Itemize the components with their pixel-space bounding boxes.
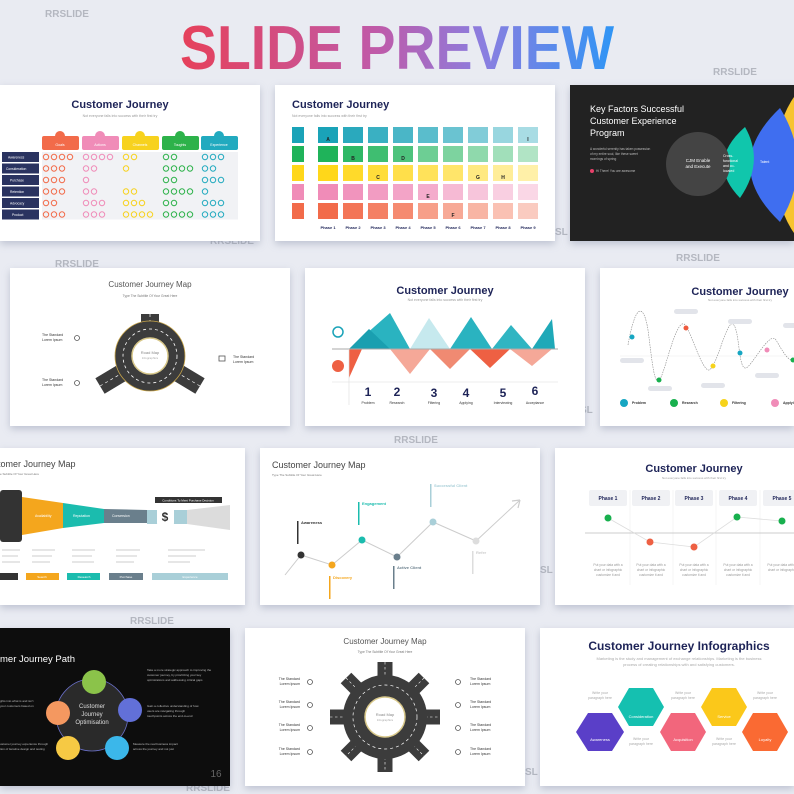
slide 8: zigzag map: Awareness <box>301 520 323 525</box>
slide 5: triangle chart: 1 <box>365 385 372 399</box>
slide 2: color grid: A <box>326 137 330 143</box>
slide 2: color grid: B <box>351 156 355 162</box>
slide 9: phase table: customize it and <box>726 573 750 577</box>
watermarks: RRSLIDE <box>210 236 254 247</box>
watermarks: RRSLIDE <box>676 253 720 264</box>
slide 1: customer journey table: Experience <box>210 143 228 147</box>
slide 2: color grid: G <box>476 175 480 181</box>
slide 9: phase table: Phase 5 <box>773 496 792 502</box>
slide 10: journey path dark: Optimisation <box>75 720 109 726</box>
slide 9: phase table: chart or infographic <box>724 568 752 572</box>
slide 1: customer journey table: Awareness <box>8 156 25 160</box>
slide 10: journey path dark: Journey <box>81 712 103 718</box>
slide 7: funnel map: Search <box>37 575 47 579</box>
slide 9: phase table: Not everyone falls into success with their first try <box>662 476 727 480</box>
slide 8: zigzag map <box>260 448 540 605</box>
slide 3: key factors dark: of my entire soul, like these sweet <box>590 152 638 156</box>
slide 12: hexagon infographics: Service <box>717 714 731 719</box>
slide 5: triangle chart: Problem <box>361 401 375 405</box>
slide 3: key factors dark: located <box>723 169 734 173</box>
slide 11: gear road map: The Standard <box>470 747 491 751</box>
slide 1: customer journey table: Channels <box>133 143 148 147</box>
slide 11: gear road map: The Standard <box>470 723 491 727</box>
slide 5: triangle chart: Filtering <box>428 401 440 405</box>
slide 10: journey path dark: tion of iterative design and testing <box>0 747 45 751</box>
slide 3: key factors dark: Key Factors Successful <box>590 104 684 114</box>
slide 7: funnel map: Reputation <box>73 514 90 518</box>
slide 10: journey path dark: your customers based on <box>0 704 34 708</box>
slide 10: journey path dark: ustomer journey experience through <box>0 742 48 746</box>
slide 10: journey path dark: 16 <box>210 769 222 780</box>
slide 11: gear road map: The Standard <box>470 700 491 704</box>
slide 5: triangle chart: 5 <box>500 386 507 400</box>
slide 7: funnel map: e Subtitle Of Your Great Here <box>0 472 39 476</box>
slide 2: color grid: Not everyone falls into success with their first try <box>292 114 367 118</box>
slide 5: triangle chart: 6 <box>532 384 539 398</box>
slide 9: phase table: Customer Journey <box>645 463 743 475</box>
slide 3: key factors dark <box>570 75 794 255</box>
watermarks: RRSLIDE <box>186 783 230 794</box>
slide 3: key factors dark: functional <box>723 159 738 163</box>
slide 10: journey path dark: touchpoints across the end-to-end <box>147 714 193 718</box>
slide 2: color grid: H <box>501 175 505 181</box>
slide 2: color grid: Phase 6 <box>445 225 461 230</box>
slide 10: journey path dark: Customer <box>79 704 105 710</box>
slide 12: hexagon infographics: Acquisition <box>673 737 693 742</box>
slide 5: triangle chart: Not everyone falls into success with their first try <box>408 298 483 302</box>
slide 11: gear road map: The Standard <box>279 700 300 704</box>
slide 10: journey path dark: Take a more strategic approach to improving the <box>147 668 212 672</box>
slide 7: funnel map: Conversion <box>112 514 130 518</box>
slide 9: phase table <box>555 448 794 605</box>
slide 4: roundabout map: Infographics <box>142 356 159 360</box>
slide 4: roundabout map: Road Map <box>141 350 160 355</box>
slide 9: phase table: Put your data with a <box>723 563 753 567</box>
slide 2: color grid: Phase 4 <box>395 225 411 230</box>
slide 12: hexagon infographics: paragraph here <box>671 696 695 700</box>
slide 6: wave journey: Problem <box>632 401 646 405</box>
slide 9: phase table: Put your data with a <box>679 563 709 567</box>
slide 4: roundabout map: Lorem Ipsum <box>42 383 63 387</box>
slide 4: roundabout map: Lorem Ipsum <box>42 338 63 342</box>
slide 12: hexagon infographics: Loyalty <box>759 737 771 742</box>
slide 7: funnel map: Availability <box>35 514 52 518</box>
slide 5: triangle chart: 3 <box>431 386 438 400</box>
slide 12: hexagon infographics: paragraph here <box>712 742 736 746</box>
slide 3: key factors dark: and co- <box>723 164 736 168</box>
slide 9: phase table: Phase 4 <box>729 496 748 502</box>
slide 7: funnel map: Research <box>78 575 91 579</box>
watermarks: RRSLIDE <box>55 259 99 270</box>
slide 1: customer journey table: Goals <box>55 143 65 147</box>
slide 3: key factors dark: A wonderful serenity has taken possession <box>590 147 650 151</box>
slide 8: zigzag map: Successful Client <box>434 483 468 488</box>
slide 9: phase table: Phase 1 <box>599 496 618 502</box>
slide 2: color grid: C <box>376 175 380 181</box>
slide 4: roundabout map: The Standard <box>233 355 254 359</box>
slide 12: hexagon infographics: paragraph here <box>588 696 612 700</box>
slide 9: phase table: chart or infographic <box>680 568 708 572</box>
slide 11: gear road map: Infographics <box>377 718 394 722</box>
slide 4: roundabout map: Type The Subtitle Of Your Great Here <box>123 294 178 298</box>
slide 5: triangle chart: 4 <box>463 386 470 400</box>
slide 2: color grid: Phase 5 <box>420 225 436 230</box>
slide 5: triangle chart: 2 <box>394 385 401 399</box>
slide 10: journey path dark <box>0 628 230 786</box>
slide 10: journey path dark: mer Journey Path <box>0 654 75 665</box>
slide 2: color grid: Phase 9 <box>520 225 536 230</box>
slide 7: funnel map: Conditions To Meet Purchase Decision <box>162 498 214 502</box>
watermarks: RRSLIDE <box>130 616 174 627</box>
slide 11: gear road map <box>245 628 525 786</box>
slide 11: gear road map: The Standard <box>279 723 300 727</box>
slide 4: roundabout map: The Standard <box>42 378 63 382</box>
slide 12: hexagon infographics: paragraph here <box>629 742 653 746</box>
watermarks: RRSLIDE <box>394 435 438 446</box>
slide 11: gear road map: The Standard <box>279 677 300 681</box>
slide 8: zigzag map: Discovery <box>333 575 353 580</box>
slide 10: journey path dark: Measure the real business impact <box>133 742 178 746</box>
slide 11: gear road map: Lorem Ipsum <box>280 752 300 756</box>
slide 11: gear road map: Road Map <box>376 712 395 717</box>
slide 9: phase table: Phase 2 <box>642 496 661 502</box>
watermarks: SL <box>580 405 593 416</box>
slide 11: gear road map: Lorem Ipsum <box>280 682 300 686</box>
slide 12: hexagon infographics: Awareness <box>590 737 610 742</box>
slide 9: phase table: Phase 3 <box>685 496 704 502</box>
slide 2: color grid: I <box>527 137 529 143</box>
watermarks: SL <box>555 227 568 238</box>
slide 1: customer journey table: Retention <box>10 190 24 194</box>
slide 2: color grid <box>275 85 555 241</box>
slide 9: phase table: customize it and <box>682 573 706 577</box>
slide 8: zigzag map: Engagement <box>362 501 387 506</box>
slide 12: hexagon infographics: process of creating relationships with and satisfying customers. <box>623 662 735 667</box>
slide 12: hexagon infographics: Customer Journey Infographics <box>588 639 770 653</box>
slide 1: customer journey table <box>0 85 260 241</box>
watermarks: SL <box>540 565 553 576</box>
slide 3: key factors dark: Cross- <box>723 154 734 158</box>
slide 2: color grid: Phase 1 <box>320 225 336 230</box>
slide 11: gear road map: Customer Journey Map <box>343 637 427 646</box>
watermarks: RRSLIDE <box>713 67 757 78</box>
slide 2: color grid: Customer Journey <box>292 99 390 111</box>
slide 10: journey path dark: customer journey, by prioritizing your key <box>147 673 202 677</box>
slide 6: wave journey: Customer Journey <box>691 286 789 298</box>
slide 2: color grid: Phase 8 <box>495 225 511 230</box>
slide 12: hexagon infographics: Marketing is the study and management of exchange relationships. Marketing is the business <box>597 656 761 661</box>
slide 1: customer journey table: Not everyone falls into success with their first try <box>83 114 158 118</box>
slide 10: journey path dark: users are navigating through <box>147 709 185 713</box>
slide 9: phase table: Put your data with a <box>593 563 623 567</box>
slide 6: wave journey: Not everyone falls into success with their first try <box>708 298 773 302</box>
slide 12: hexagon infographics: Write your <box>757 691 774 695</box>
slide 1: customer journey table: Purchase <box>10 178 24 182</box>
watermarks: SL <box>525 767 538 778</box>
slide 10: journey path dark: ghts into what is and isn't <box>0 699 34 703</box>
slide 12: hexagon infographics <box>540 628 794 786</box>
slide 1: customer journey table: Consideration <box>6 167 27 171</box>
slide 12: hexagon infographics: Consideration <box>629 714 653 719</box>
slide 6: wave journey <box>600 268 794 426</box>
slide 3: key factors dark: mornings of spring <box>590 157 616 161</box>
slide 4: roundabout map: Lorem Ipsum <box>233 360 254 364</box>
slide 2: color grid: Phase 7 <box>470 225 486 230</box>
slide 3: key factors dark: and Execute <box>685 164 711 169</box>
slide 2: color grid: Phase 2 <box>345 225 361 230</box>
slide 9: phase table: chart or infographic <box>637 568 665 572</box>
slide 11: gear road map: The Standard <box>470 677 491 681</box>
slide 7: funnel map <box>0 448 245 605</box>
slide 11: gear road map: Lorem Ipsum <box>470 705 491 709</box>
slide 9: phase table: customize it and <box>596 573 620 577</box>
slide 3: key factors dark: CJM Enable <box>686 158 711 163</box>
slide 1: customer journey table: Advocacy <box>10 202 25 206</box>
slide 8: zigzag map: Customer Journey Map <box>272 460 366 470</box>
slide 11: gear road map: Lorem Ipsum <box>280 728 300 732</box>
watermarks: RRSLIDE <box>45 9 89 20</box>
slide 11: gear road map: Type The Subtitle Of Your Great Here <box>358 650 413 654</box>
slide 9: phase table: Put your data with a <box>636 563 666 567</box>
slide 8: zigzag map: Active Client <box>397 565 422 570</box>
slide 7: funnel map: Experience <box>182 575 198 579</box>
slide 11: gear road map: Lorem Ipsum <box>280 705 300 709</box>
slide 2: color grid: F <box>451 213 455 219</box>
slide 9: phase table: customize it and <box>639 573 663 577</box>
slide 2: color grid: D <box>401 156 405 162</box>
slide 6: wave journey: Filtering <box>732 401 746 405</box>
slide 11: gear road map: Lorem Ipsum <box>470 728 491 732</box>
slide 1: customer journey table: Product <box>12 213 23 217</box>
slide 3: key factors dark: Talent <box>760 160 769 164</box>
slide 7: funnel map: Purchase <box>120 575 133 579</box>
slide 7: funnel map: $ <box>162 510 169 524</box>
slide 11: gear road map: Lorem Ipsum <box>470 682 491 686</box>
slide 5: triangle chart: Interviewing <box>494 401 512 405</box>
slide 8: zigzag map: Type The Subtitle Of Your Great Here <box>272 473 322 477</box>
slide 3: key factors dark: Hi There! You are awesome <box>596 169 636 173</box>
slide 12: hexagon infographics: Write your <box>675 691 692 695</box>
slide 12: hexagon infographics: Write your <box>716 737 733 741</box>
slide 1: customer journey table: Customer Journey <box>71 99 169 111</box>
slide 5: triangle chart: Research <box>390 401 405 405</box>
slide 5: triangle chart: Applying <box>459 401 473 405</box>
slide 8: zigzag map: Refer <box>476 550 487 555</box>
slide 3: key factors dark: Program <box>590 128 625 138</box>
slide 5: triangle chart <box>305 268 585 426</box>
slide 3: key factors dark: Customer Experience <box>590 116 677 126</box>
slide 1: customer journey table: Toughts <box>174 143 186 147</box>
slide 6: wave journey: Research <box>682 401 698 405</box>
slide 10: journey path dark: optimizations and addressing critical gaps <box>147 678 203 682</box>
slide 2: color grid: E <box>426 194 430 200</box>
slide 12: hexagon infographics: Write your <box>592 691 609 695</box>
slide 4: roundabout map: Customer Journey Map <box>108 280 192 289</box>
slide 9: phase table: chart or infographic <box>594 568 622 572</box>
slide 5: triangle chart: Acceptance <box>526 401 544 405</box>
slide 12: hexagon infographics: paragraph here <box>753 696 777 700</box>
slide 1: customer journey table: Actions <box>94 143 106 147</box>
slide 2: color grid: Phase 3 <box>370 225 386 230</box>
slide 5: triangle chart: Customer Journey <box>396 285 494 297</box>
slide 11: gear road map: The Standard <box>279 747 300 751</box>
slide 11: gear road map: Lorem Ipsum <box>470 752 491 756</box>
slide 4: roundabout map: The Standard <box>42 333 63 337</box>
title: SLIDE PREVIEW <box>180 14 614 83</box>
slide 12: hexagon infographics: Write your <box>633 737 650 741</box>
slide 10: journey path dark: across the journey and not just <box>133 747 174 751</box>
slide 10: journey path dark: Gain a collective understanding of how <box>147 704 199 708</box>
slide 4: roundabout map <box>10 268 290 426</box>
